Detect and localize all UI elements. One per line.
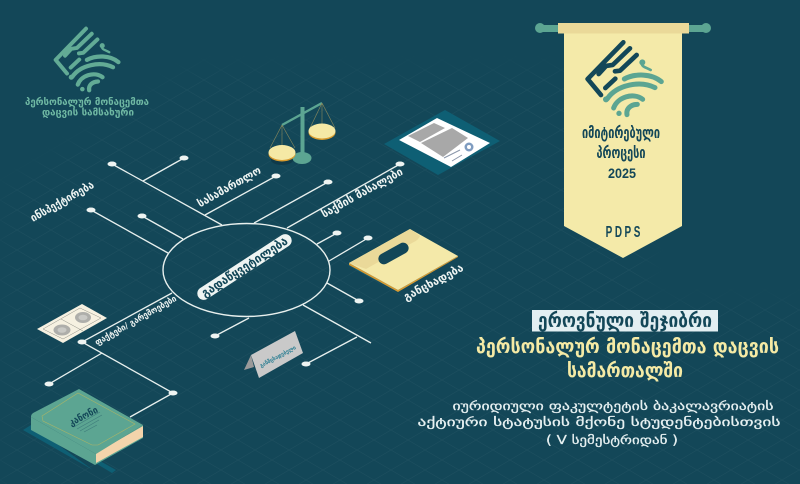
connector lines (49, 158, 400, 417)
label: application: განცხადება (401, 261, 466, 304)
name plate front (251, 331, 303, 378)
icon: fingerprint card (37, 304, 107, 343)
connector nodes (44, 156, 404, 396)
banner title: 2025 (608, 166, 636, 181)
banner title: იმიტირებული (582, 123, 660, 142)
central diagram (28, 156, 466, 417)
icon: case documents (384, 110, 500, 175)
icon: envelope (347, 229, 458, 292)
banner logo (588, 42, 661, 116)
book body (31, 417, 143, 465)
book shadow (23, 425, 116, 473)
label: facts and circumstances: ფაქტები/ გარემოებები (93, 293, 179, 348)
book title: კანონი (67, 405, 100, 429)
banner PDPS: PDPS (606, 223, 640, 241)
banner title (582, 123, 660, 181)
banner body (564, 33, 682, 258)
icon: law book (23, 389, 143, 473)
organisation name: პერსონალურ მონაცემთა (25, 97, 149, 108)
banner (535, 23, 711, 258)
banner rod (535, 23, 711, 33)
eligibility text (418, 399, 780, 447)
eligibility text: აქტიური სტატუსის მქონე სტუდენტებისთვის (418, 415, 780, 429)
book cover (31, 389, 143, 454)
banner header (558, 23, 689, 34)
name plate back (244, 355, 254, 370)
label: inspection: ინსპექტირება (28, 178, 96, 225)
heading line 3: სამართალში (567, 358, 683, 382)
label: court: სასამართლო (195, 164, 263, 210)
icon: name plate (244, 331, 303, 378)
book title lines (74, 412, 102, 432)
organisation name: დაცვის სამსახური (42, 108, 134, 118)
book pages (96, 426, 143, 463)
name plate text: განმცხადებელი (259, 345, 297, 369)
banner title: პროცესი (596, 143, 646, 162)
icon: scales of justice (268, 103, 336, 165)
heading line 1: ეროვნული შეჯიბრი (538, 308, 712, 332)
central ellipse (163, 224, 330, 316)
label: case materials: საქმის მასალები (319, 165, 405, 221)
logo: personal data protection service (56, 29, 118, 91)
central pill label: გადაწყვეტილება (199, 234, 291, 300)
eligibility text: ( V სემესტრიდან ) (546, 433, 678, 447)
main heading (476, 308, 779, 382)
heading highlight box (532, 310, 718, 332)
eligibility text: იურიდიული ფაკულტეტის ბაკალავრიატის (452, 399, 774, 413)
organisation name (25, 97, 149, 118)
